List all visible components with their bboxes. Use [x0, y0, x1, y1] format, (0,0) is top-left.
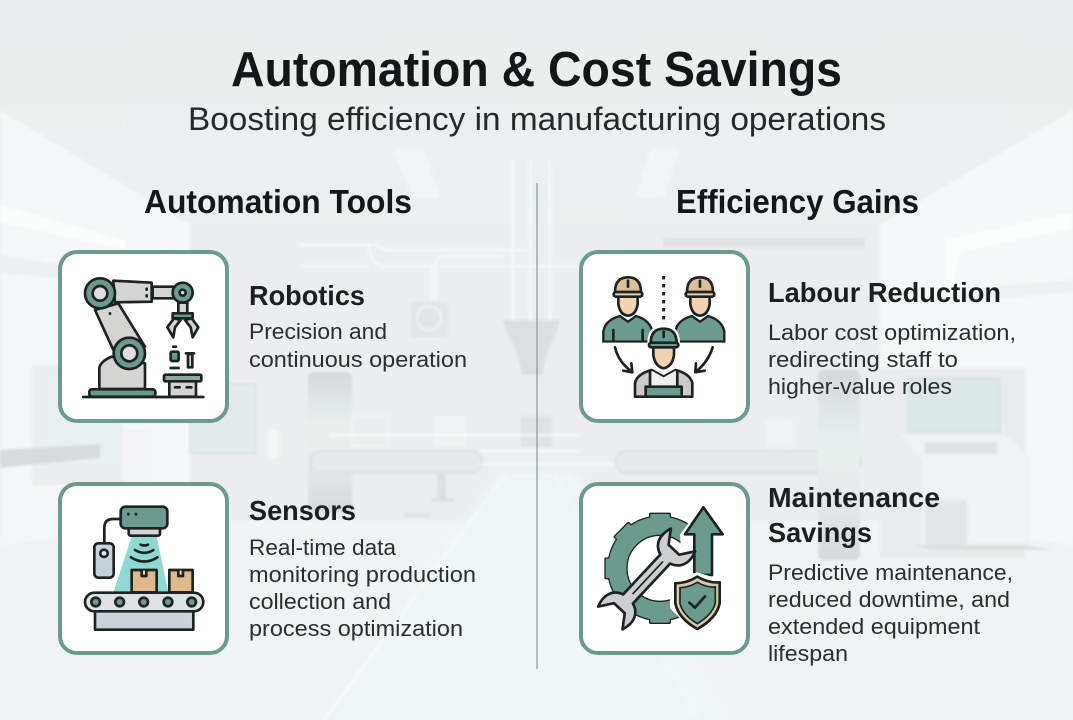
heading: efficiency gains: Efficiency Gains — [676, 183, 919, 220]
panel: robotics — [60, 252, 467, 421]
label: robotics: Robotics — [249, 280, 365, 311]
icon card: workers — [581, 252, 748, 421]
description: sensors: collection and — [249, 589, 391, 614]
panel: maintenance savings — [581, 482, 1013, 666]
label: maintenance savings — [768, 482, 940, 548]
description: robotics: continuous operation — [249, 347, 467, 372]
description: sensors — [249, 535, 476, 641]
icon card: sensor over conveyor — [60, 484, 227, 653]
description: maintenance savings: Predictive maintenance, — [768, 560, 1013, 585]
subtitle: Boosting efficiency in manufacturing operations — [188, 101, 886, 137]
description: labour reduction: redirecting staff to — [768, 347, 958, 372]
heading: automation tools: Automation Tools — [144, 183, 412, 220]
description: labour reduction: higher-value roles — [768, 374, 952, 399]
panel: labour reduction — [581, 252, 1016, 421]
icon card: gear, wrench and shield — [581, 484, 748, 653]
description: maintenance savings — [768, 560, 1013, 666]
description: sensors: process optimization — [249, 616, 463, 641]
description: sensors: Real-time data — [249, 535, 396, 560]
description: robotics: Precision and — [249, 319, 387, 344]
description: maintenance savings: extended equipment — [768, 614, 981, 639]
description: robotics — [249, 319, 467, 372]
description: labour reduction: Labor cost optimization, — [768, 320, 1016, 345]
panel: sensors — [60, 484, 476, 653]
title: Automation & Cost Savings — [231, 43, 842, 97]
description: maintenance savings: reduced downtime, and — [768, 587, 1010, 612]
label: sensors: Sensors — [249, 495, 356, 526]
label: maintenance savings: Maintenance — [768, 482, 940, 513]
label: maintenance savings: Savings — [768, 517, 872, 548]
description: labour reduction — [768, 320, 1016, 399]
icon card: robot arm — [60, 252, 227, 421]
column divider — [536, 183, 538, 669]
description: maintenance savings: lifespan — [768, 641, 848, 666]
description: sensors: monitoring production — [249, 562, 476, 587]
label: labour reduction: Labour Reduction — [768, 277, 1001, 308]
